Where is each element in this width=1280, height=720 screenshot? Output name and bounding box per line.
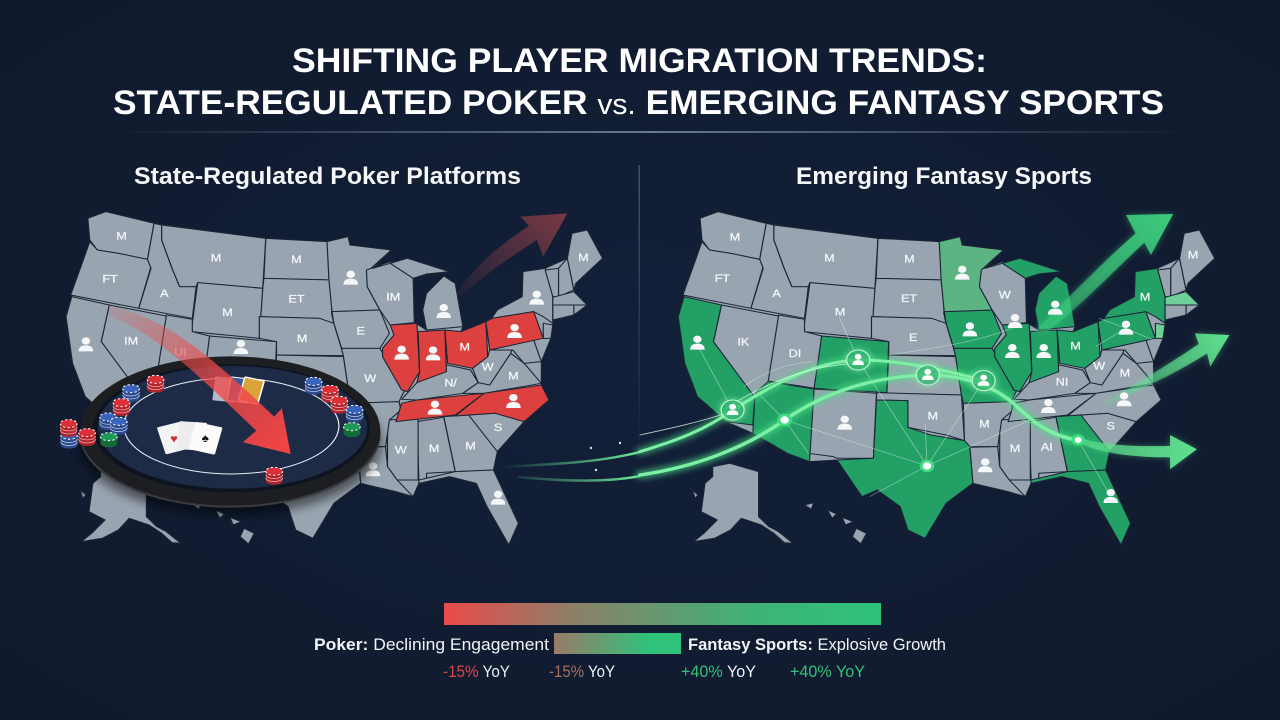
state labels: IM bbox=[124, 334, 138, 347]
state labels: M bbox=[1070, 339, 1081, 352]
states: growth green bbox=[678, 237, 1199, 545]
legend: fantasy yoy values: +40% YoY bbox=[790, 663, 865, 681]
state labels: A bbox=[160, 287, 169, 300]
state labels: W bbox=[395, 443, 408, 456]
arrow: decline into table bbox=[109, 305, 291, 454]
legend: gradient bar bbox=[444, 603, 881, 625]
state labels: M bbox=[429, 442, 439, 455]
state labels: M bbox=[211, 251, 221, 264]
state labels: UI bbox=[174, 345, 187, 358]
fantasy overlays bbox=[640, 214, 1229, 503]
heading: poker: State-Regulated Poker Platforms bbox=[134, 163, 521, 190]
glowing nodes bbox=[719, 348, 1083, 471]
title bbox=[113, 42, 1164, 122]
state labels: M bbox=[465, 439, 476, 452]
legend: poker label: Poker: Declining Engagement bbox=[314, 635, 549, 654]
state labels: M bbox=[460, 340, 470, 353]
state labels: M bbox=[508, 369, 519, 382]
chip stacks bbox=[60, 375, 363, 485]
state labels: E bbox=[909, 331, 918, 344]
panel: fantasy map bbox=[678, 212, 1215, 545]
arrow: growth north-east bbox=[1034, 214, 1173, 332]
heading: fantasy: Emerging Fantasy Sports bbox=[796, 163, 1092, 190]
state labels: M bbox=[291, 253, 302, 266]
state labels: A bbox=[772, 287, 781, 300]
legend: fantasy yoy values: +40% YoY bbox=[681, 663, 756, 681]
state labels: M bbox=[297, 332, 307, 345]
legend: fantasy yoy values bbox=[681, 663, 865, 681]
state labels: S bbox=[1107, 419, 1115, 432]
state labels: DI bbox=[789, 347, 801, 360]
network lines bbox=[697, 317, 1153, 497]
states: grey base bbox=[66, 212, 603, 545]
state labels bbox=[102, 229, 589, 456]
state labels bbox=[715, 230, 1198, 455]
playing cards: table centre bbox=[157, 421, 223, 455]
state labels: M bbox=[222, 306, 233, 319]
state labels: FT bbox=[102, 272, 118, 285]
flow streaks crossing the divider bbox=[500, 442, 640, 481]
legend: fantasy label: Fantasy Sports: Explosive Growth bbox=[688, 635, 946, 654]
states: declining red bbox=[383, 312, 549, 422]
flow curves bbox=[640, 360, 1078, 475]
state labels: M bbox=[979, 417, 990, 430]
state labels: W bbox=[482, 360, 495, 373]
state labels: S bbox=[494, 421, 502, 434]
state labels: M bbox=[730, 230, 740, 243]
legend: small gradient bar bbox=[554, 633, 681, 654]
poker table bbox=[60, 356, 381, 515]
state labels: M bbox=[116, 229, 127, 242]
arrow: growth south-east bbox=[1080, 435, 1197, 469]
playing cards: table centre: ♠ bbox=[202, 431, 209, 445]
state labels: M bbox=[1140, 290, 1150, 303]
state labels: E bbox=[356, 324, 365, 337]
title: STATE-REGULATED POKER vs. EMERGING FANTASY SPORTS bbox=[113, 84, 1164, 122]
state labels: M bbox=[1188, 248, 1198, 261]
state labels: W bbox=[364, 372, 377, 385]
player icons bbox=[690, 266, 1133, 503]
state labels: W bbox=[999, 288, 1012, 301]
state labels: IM bbox=[386, 290, 400, 303]
player icons bbox=[79, 271, 544, 505]
state labels: ET bbox=[901, 292, 917, 305]
state labels: N/ bbox=[444, 376, 458, 389]
state labels: M bbox=[824, 251, 835, 264]
state labels: NI bbox=[1056, 375, 1068, 388]
state labels: ET bbox=[288, 292, 304, 305]
panel: poker map bbox=[60, 212, 603, 545]
state labels: AI bbox=[1041, 440, 1053, 453]
state labels: M bbox=[1010, 442, 1020, 455]
states: grey base bbox=[678, 212, 1215, 545]
playing cards: table top bbox=[212, 376, 264, 404]
state labels: FT bbox=[715, 272, 730, 285]
arrow: players leaving bbox=[456, 213, 567, 297]
title: SHIFTING PLAYER MIGRATION TRENDS: bbox=[292, 42, 987, 80]
state labels: IK bbox=[737, 335, 749, 348]
legend: poker yoy values: -15% YoY bbox=[443, 663, 510, 681]
state labels: M bbox=[904, 252, 915, 265]
state labels: W bbox=[1093, 359, 1106, 372]
state labels: M bbox=[835, 305, 845, 318]
arrow: growth east bbox=[1099, 333, 1229, 407]
legend: poker yoy values: -15% YoY bbox=[549, 663, 615, 681]
state labels: M bbox=[1120, 366, 1130, 379]
state labels: M bbox=[928, 409, 938, 422]
state labels: M bbox=[578, 251, 589, 264]
playing cards: table centre: ♥ bbox=[170, 432, 178, 445]
legend: poker yoy values bbox=[443, 663, 615, 681]
